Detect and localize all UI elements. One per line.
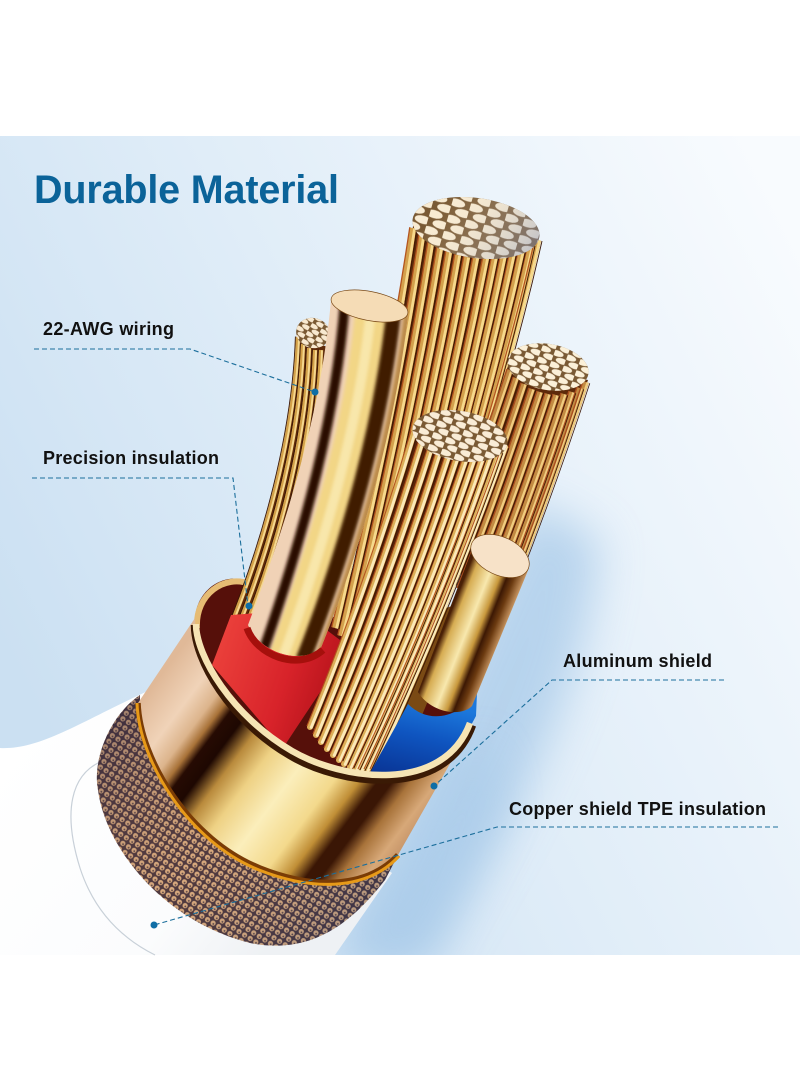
orange ring xyxy=(137,703,399,884)
strand ends, top of large bundle xyxy=(408,189,544,267)
white cable body swoosh xyxy=(0,690,392,955)
gold conductor end cap xyxy=(328,284,411,328)
red insulation xyxy=(212,610,340,748)
blue insulation xyxy=(366,693,477,780)
callout: Aluminum shield: Aluminum shield xyxy=(563,651,712,671)
wire: large strand bundle, back xyxy=(332,189,544,659)
gold sleeve front xyxy=(138,618,472,882)
wire: solid gold conductor xyxy=(248,284,412,660)
callout: Aluminum shield xyxy=(430,651,724,790)
strand ends, top of small bundle xyxy=(293,314,333,352)
red insulation inner lip xyxy=(247,628,323,660)
callout: 22-AWG wiring xyxy=(34,319,318,396)
wire: front strand bundle xyxy=(307,403,512,772)
knurled braided band xyxy=(97,695,398,946)
small conductor end cap xyxy=(464,526,536,586)
callout: Copper shield TPE insulation xyxy=(150,799,778,928)
wire: small 22-AWG bundle xyxy=(223,314,333,650)
callout: Copper shield TPE insulation: Copper shield TPE insulation xyxy=(509,799,766,819)
background shadow behind cable xyxy=(330,500,600,965)
title: Durable Material xyxy=(34,168,339,212)
wire: right strand bundle xyxy=(435,337,592,596)
callout: Precision insulation xyxy=(32,448,252,610)
back rim of sleeve xyxy=(197,581,310,628)
cable illustration xyxy=(71,189,592,955)
strand ends, top of front bundle xyxy=(408,403,512,469)
background panel xyxy=(0,136,800,955)
sleeve front rim xyxy=(195,624,472,780)
wire: small solid gold conductor xyxy=(418,526,536,712)
callout: Precision insulation: Precision insulation xyxy=(43,448,219,468)
sleeve interior xyxy=(195,579,472,780)
bronze filler between front bundle and small conductor xyxy=(395,600,470,720)
strand ends, top of right bundle xyxy=(504,337,592,397)
white collar outline xyxy=(71,762,155,955)
callout: 22-AWG wiring: 22-AWG wiring xyxy=(43,319,174,339)
